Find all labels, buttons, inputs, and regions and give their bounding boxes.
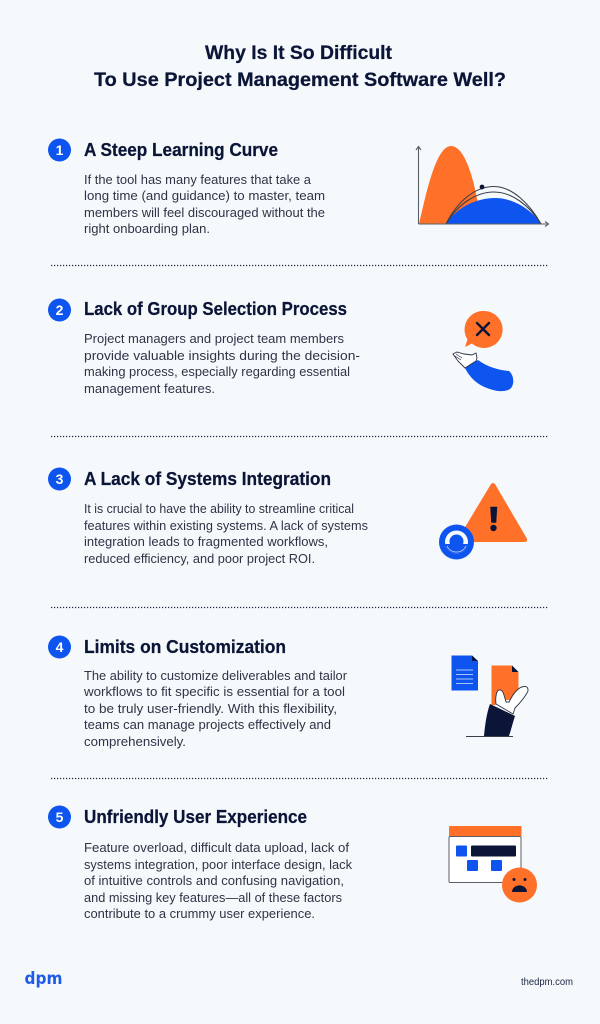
icon: app window with sad face [449,826,537,902]
heading 3: A Lack of Systems Integration [84,469,331,489]
heading 1: A Steep Learning Curve [84,140,278,160]
body text 2: provide valuable insights during the decision- [84,348,360,363]
panel: section 2 [48,298,513,396]
number badge 1: 1 [56,142,64,158]
body text 4: teams can manage projects effectively and [84,717,331,732]
body text 5 [84,840,352,921]
number badge 2: 2 [56,302,64,318]
icon: warning triangle and blue ring [439,484,527,560]
title [94,42,506,91]
body text 1: If the tool has many features that take a [84,172,312,187]
number badge 5: 5 [56,809,64,825]
body text 3 [84,501,368,566]
title: Why Is It So Difficult [205,42,392,64]
body text 5: contribute to a crummy user experience. [84,906,315,921]
icon: documents and hand [452,656,528,736]
heading 4: Limits on Customization [84,637,286,657]
panel: section 1 [48,138,548,236]
body text 3: integration leads to fragmented workflows, [84,534,328,549]
body text 5: of intuitive controls and confusing navigation, [84,873,344,888]
panel: section 3 [48,468,527,566]
number badge 5 [48,806,71,828]
body text 4 [83,668,348,749]
heading 5: Unfriendly User Experience [84,807,307,827]
number badge 2 [48,298,71,322]
body text 2: making process, especially regarding essential [84,364,350,379]
body text 4: The ability to customize deliverables and tailor [84,668,348,683]
body text 4: workflows to fit specific is essential for a tool [83,684,345,699]
number badge 3: 3 [56,471,64,487]
number badge 4 [48,636,71,658]
logo: dpm [24,969,62,989]
body text 3: features within existing systems. A lack of systems [84,518,368,533]
website url: thedpm.com [521,977,573,988]
number badge 3 [48,468,71,490]
body text 5: Feature overload, difficult data upload, lack of [84,840,349,855]
title: To Use Project Management Software Well? [94,69,506,91]
body text 5: and missing key features—all of these factors [84,890,342,905]
icon: learning curve chart [416,146,548,226]
panel: section 5 [48,806,537,921]
body text 1: right onboarding plan. [84,221,210,236]
body text 4: to be truly user-friendly. With this flexibility, [84,701,337,716]
body text 2 [84,331,360,396]
panel: section 4 [48,636,528,749]
body text 1: members will feel discouraged without the [84,205,325,220]
body text 3: reduced efficiency, and poor project ROI. [84,551,315,566]
icon: rejected speech bubble and hand [453,311,513,391]
body text 3: It is crucial to have the ability to streamline critical [84,501,354,516]
body text 1 [84,172,325,236]
body text 2: management features. [84,381,215,396]
body text 4: comprehensively. [84,734,186,749]
heading 2: Lack of Group Selection Process [84,299,347,319]
body text 2: Project managers and project team members [84,331,344,346]
body text 5: systems integration, poor interface design, lack [84,857,352,872]
number badge 4: 4 [56,639,64,655]
number badge 1 [48,138,71,162]
body text 1: long time (and guidance) to master, team [84,188,325,203]
